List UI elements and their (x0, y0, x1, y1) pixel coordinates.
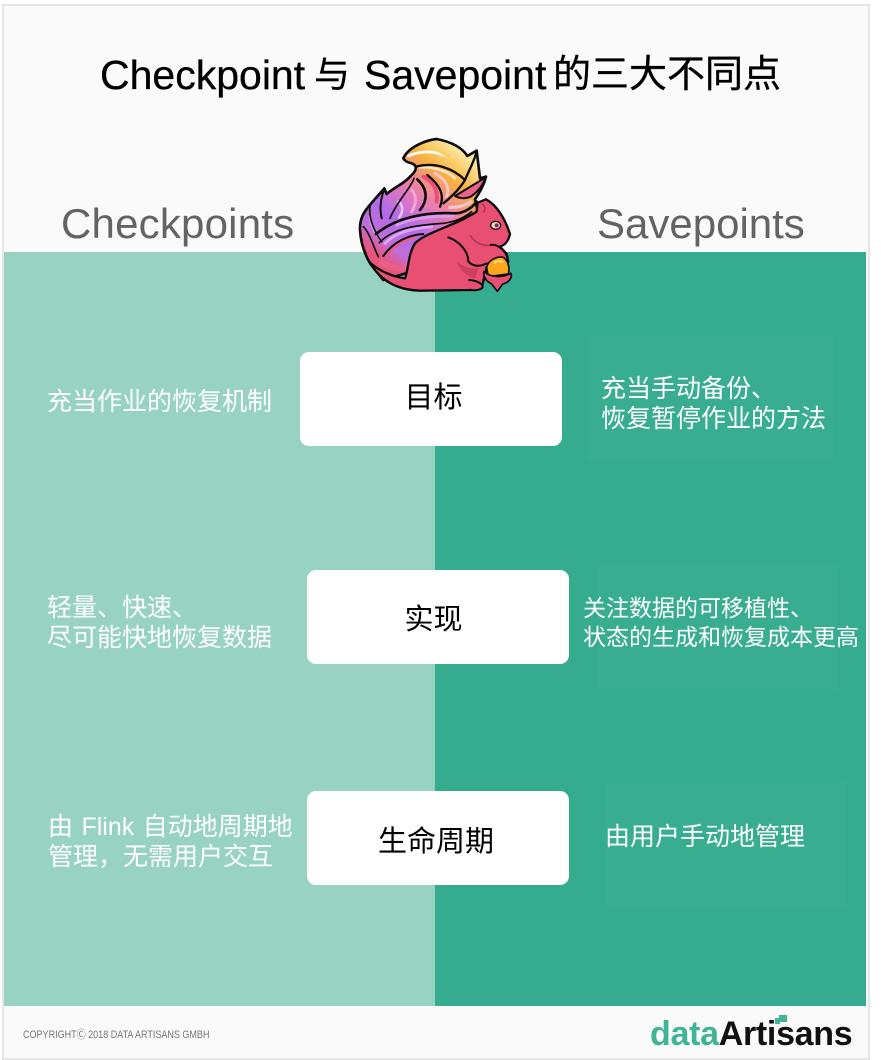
logo squares (775, 1015, 787, 1024)
tail: gradient plume silhouette (360, 139, 486, 280)
panel: checkpoints column (4, 252, 435, 1006)
label box: 生命周期 (307, 791, 569, 885)
tail: black feather strokes (363, 152, 477, 257)
title: 与 (314, 54, 350, 95)
text: checkpoint implementation (47, 594, 272, 652)
heading: Checkpoints: Checkpoints (61, 200, 294, 247)
logo wordmark: dataArtisans (650, 1015, 852, 1053)
text background: savepoint goal (588, 335, 833, 460)
acorn (484, 257, 511, 291)
text: savepoint implementation (583, 595, 859, 650)
body: ear and inner shadow (448, 204, 507, 290)
text: savepoint goal (601, 375, 826, 433)
text: checkpoint lifecycle: 管理，无需用户交互 (48, 843, 273, 871)
text: savepoint implementation: 状态的生成和恢复成本更高 (583, 624, 859, 650)
text: checkpoint implementation: 轻量、快速、 (47, 594, 197, 622)
heading: Savepoints: Savepoints (597, 200, 805, 247)
logo: dataArtisans (650, 1015, 852, 1053)
label box: 目标 (300, 352, 562, 446)
panel: savepoints column (435, 252, 866, 1006)
text background: savepoint lifecycle (605, 782, 845, 907)
footer: copyright: COPYRIGHTⒸ 2018 DATA ARTISANS GMBH (23, 1029, 209, 1041)
tail: colour stripes (370, 145, 471, 269)
eye (491, 221, 501, 229)
label box: 实现: 实现 (404, 604, 462, 636)
text background: savepoint implementation (597, 565, 837, 690)
text: checkpoint lifecycle (48, 813, 293, 871)
label box: 实现 (307, 570, 569, 664)
label box: 生命周期: 生命周期 (378, 826, 494, 858)
body: pink torso and head (370, 199, 510, 291)
icon: Flink squirrel mascot (358, 138, 512, 292)
text: checkpoint lifecycle: 由 Flink 自动地周期地 (48, 813, 293, 841)
tail: upper leaf (455, 177, 486, 198)
title (100, 52, 781, 98)
text: checkpoint goal: 充当作业的恢复机制 (47, 388, 272, 416)
label box: 目标: 目标 (404, 382, 462, 414)
text: checkpoint implementation: 尽可能快地恢复数据 (47, 624, 272, 652)
title: 的三大不同点 (553, 54, 781, 96)
text: savepoint lifecycle: 由用户手动地管理 (605, 823, 805, 851)
text: savepoint implementation: 关注数据的可移植性、 (583, 595, 813, 621)
title: Checkpoint (100, 52, 305, 98)
title: Savepoint (364, 52, 546, 98)
text: savepoint goal: 充当手动备份、 (601, 375, 776, 403)
text: savepoint goal: 恢复暂停作业的方法 (601, 405, 826, 433)
